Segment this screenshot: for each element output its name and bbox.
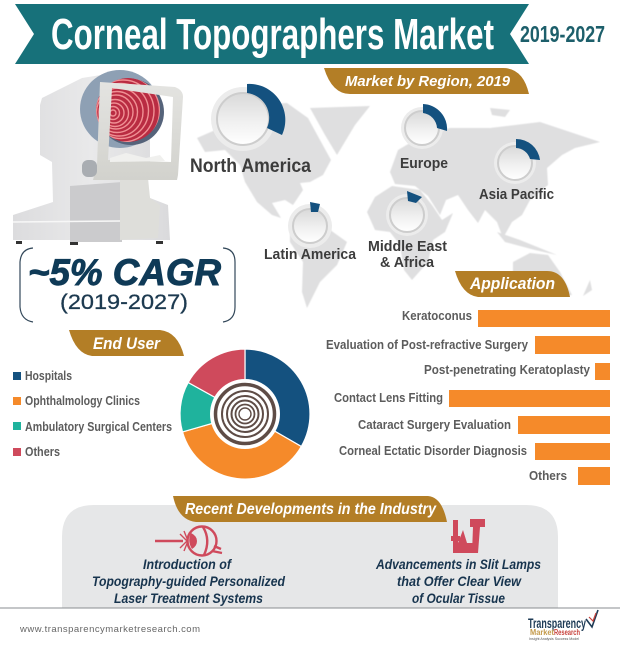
logo: Transparency Market Research: Market: [530, 628, 554, 637]
bar chart: application: Others: [529, 468, 567, 483]
legend: end user: Ambulatory Surgical Centers: [25, 419, 172, 434]
panel: recent developments: [62, 496, 558, 608]
text: advancements: that Offer Clear View: [397, 573, 522, 589]
bar chart: application: Post-penetrating Keratoplasty: [424, 362, 591, 377]
logo: Transparency Market Research: [528, 610, 598, 641]
title banner: [15, 4, 529, 64]
device: corneal topographer: [13, 70, 183, 245]
label: Asia Pacific: Asia Pacific: [479, 186, 554, 203]
world map background: [197, 103, 600, 308]
CAGR callout: [20, 248, 235, 322]
text: advancements: Advancements in Slit Lamps: [375, 556, 541, 572]
legend: end user: Hospitals: [25, 368, 72, 383]
logo: Transparency Market Research: Insight Analysis Success Model: [529, 636, 579, 641]
label: Europe: Europe: [400, 155, 448, 172]
text: introduction: Topography-guided Personalized: [92, 573, 285, 589]
bar chart: application: Corneal Ectatic Disorder Diagnosis: [339, 443, 527, 458]
donut chart: end user: [180, 349, 310, 479]
heading: market by region: [324, 68, 529, 94]
bar chart: application: Cataract Surgery Evaluation: [358, 417, 511, 432]
text: introduction: Laser Treatment Systems: [114, 590, 263, 606]
bar chart: application: [326, 308, 610, 485]
bar chart: application: Contact Lens Fitting: [334, 390, 443, 405]
legend: end user: Others: [25, 444, 60, 459]
heading: market by region: Market by Region, 2019: [345, 73, 511, 90]
donut: Middle East and Africa: [386, 191, 428, 236]
icon: slit lamp: [451, 519, 485, 553]
red placido disc: [96, 78, 160, 142]
label: Latin America: Latin America: [264, 246, 357, 263]
heading: application: Application: [469, 274, 555, 293]
donut: Europe: [401, 104, 447, 149]
text: introduction: [92, 556, 285, 606]
heading: recent developments: [173, 496, 447, 522]
heading: recent developments: Recent Developments in the Industry: [185, 501, 437, 518]
logo: Transparency Market Research: Transparency: [528, 615, 586, 631]
bar chart: application: Keratoconus: [402, 308, 472, 323]
label: Middle East and Africa: Middle East: [368, 238, 447, 255]
website url: www.transparencymarketresearch.com: [19, 624, 200, 635]
legend: end user: [13, 368, 172, 459]
legend: end user: Ophthalmology Clinics: [25, 393, 140, 408]
heading: application: [455, 271, 570, 297]
icon: laser eye: [155, 526, 222, 556]
bar chart: application: Evaluation of Post-refractive Surgery: [326, 337, 529, 352]
logo: Transparency Market Research: Research: [554, 628, 580, 637]
label: Middle East and Africa: & Africa: [380, 254, 435, 271]
heading: end user: [69, 330, 184, 356]
text: introduction: Introduction of: [143, 556, 232, 572]
donut: North America: [211, 84, 285, 151]
heading: end user: End User: [93, 334, 161, 353]
donut: Asia Pacific: [494, 139, 540, 184]
CAGR callout: (2019-2027): [60, 291, 188, 314]
CAGR callout: ~5% CAGR: [28, 252, 221, 293]
donut: Latin America: [288, 202, 332, 248]
text: advancements: [375, 556, 541, 606]
text: advancements: of Ocular Tissue: [412, 590, 505, 606]
label: Middle East and Africa: [368, 238, 447, 271]
label: North America: North America: [190, 156, 311, 177]
